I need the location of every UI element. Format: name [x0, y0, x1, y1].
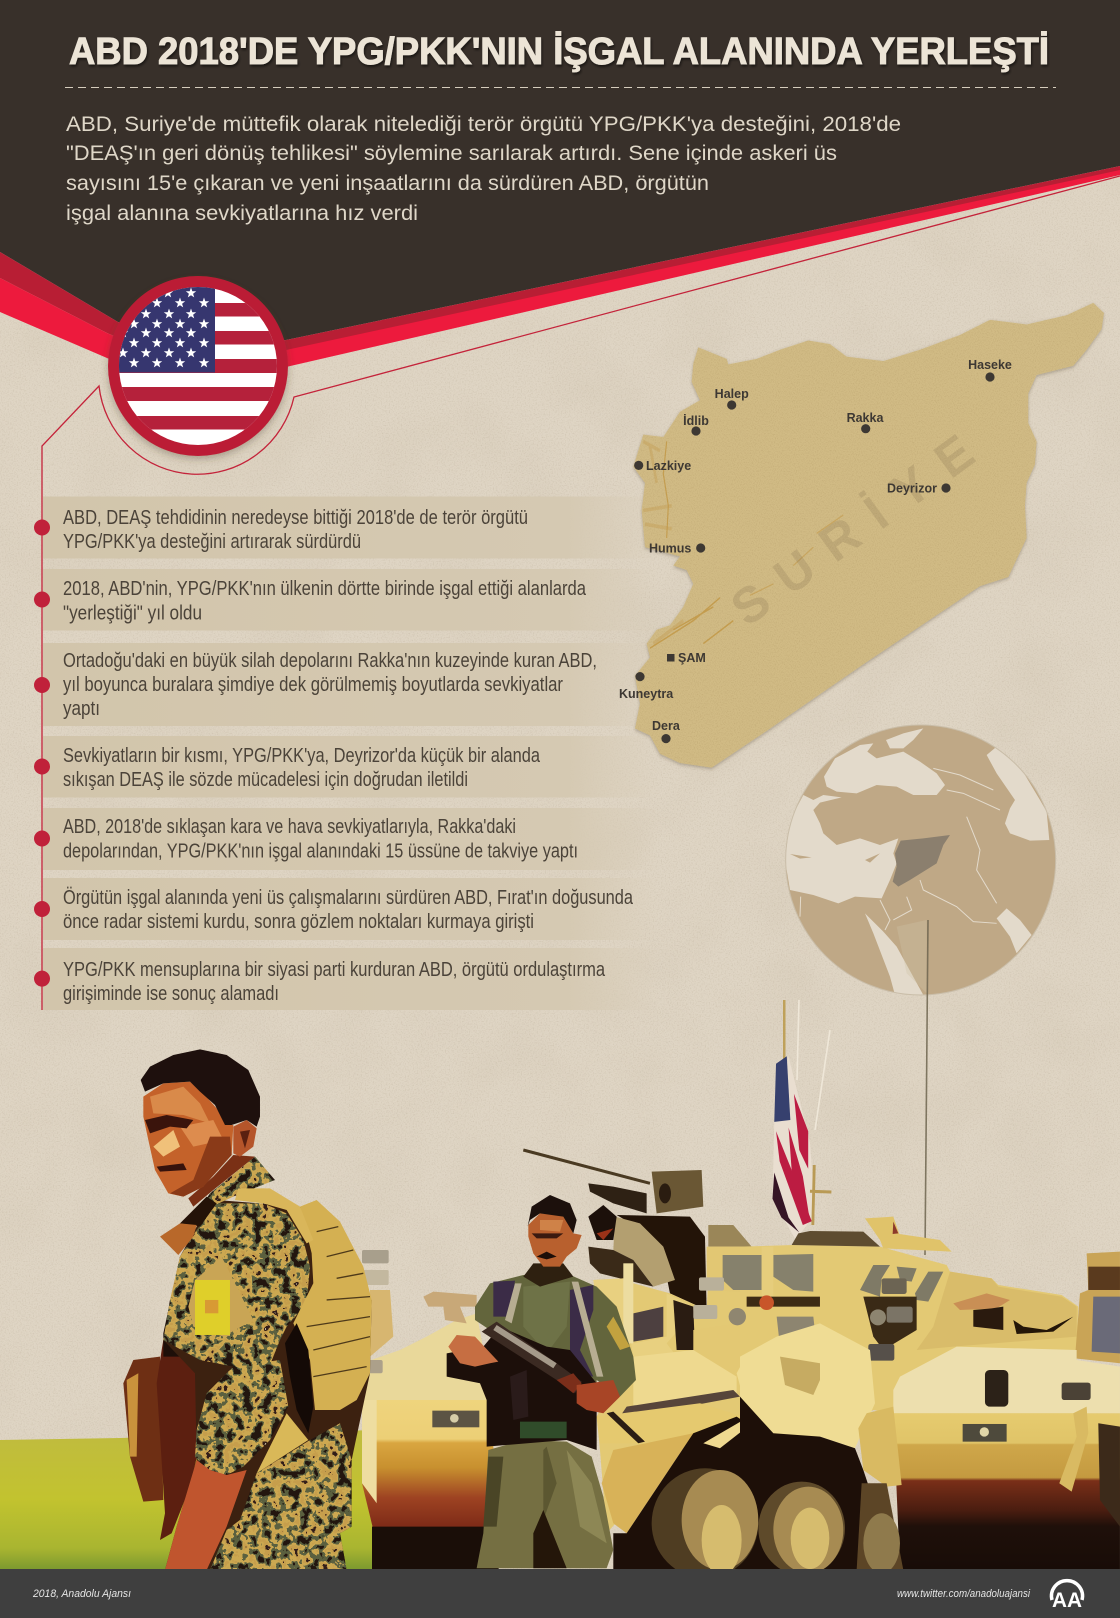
city markers: Humus — [649, 542, 691, 556]
credit: 2018, Anadolu Ajansı — [32, 1588, 131, 1600]
city markers: Deyrizor — [887, 482, 937, 496]
right part of vehicles — [740, 1217, 1120, 1575]
item 4: Sevkiyatların bir kısmı, YPG/PKK'ya, Deyrizor'da küçük bir alanda — [63, 745, 541, 767]
central lights — [863, 1297, 917, 1350]
icon: US flag badge — [108, 276, 288, 456]
vehicle flag — [772, 1000, 831, 1240]
centre vehicle rear turret — [523, 1150, 752, 1310]
map: Syria — [619, 303, 1104, 768]
second soldier — [447, 1195, 645, 1568]
item 1 — [34, 496, 660, 558]
wheel — [758, 1482, 845, 1575]
city markers — [619, 358, 1012, 743]
header dark panel — [0, 0, 1120, 350]
city markers: İdlib — [683, 413, 709, 428]
arm patch — [188, 1257, 253, 1337]
grass field — [0, 1430, 373, 1569]
watermark: SURİYE: SURİYE — [721, 424, 984, 637]
forearm — [165, 1460, 247, 1570]
item 1: YPG/PKK'ya desteğini artırarak sürdürdü — [63, 531, 361, 553]
front wheel — [652, 1468, 758, 1578]
torso base — [163, 1200, 372, 1570]
red ribbon — [0, 166, 1120, 395]
city markers: Dera — [652, 719, 681, 733]
chassis — [740, 1396, 868, 1569]
dark body — [157, 1300, 200, 1540]
foreground soldier — [123, 1049, 372, 1573]
item 4: sıkışan DEAŞ ile sözde mücadelesi için doğrudan iletildi — [63, 769, 468, 791]
trousers — [477, 1440, 613, 1568]
item 7: girişiminde ise sonuç alamadı — [63, 983, 279, 1005]
item 7: YPG/PKK mensuplarına bir siyasi parti kurduran ABD, örgütü ordulaştırma — [63, 959, 606, 981]
rifle — [482, 1322, 582, 1393]
head — [523, 1263, 573, 1287]
item 2: 2018, ABD'nin, YPG/PKK'nın ülkenin dörtte birinde işgal ettiği alanlarda — [63, 578, 587, 600]
hair — [141, 1049, 260, 1127]
neck — [188, 1155, 255, 1207]
item 5: depolarından, YPG/PKK'nın işgal alanındaki 15 üssüne de takviye yaptı — [63, 840, 578, 862]
item 3: yaptı — [63, 698, 100, 720]
locator globe — [785, 725, 1056, 995]
intro text: ABD, Suriye'de müttefik olarak nitelediği terör örgütü YPG/PKK'ya desteğini, 2018'de — [66, 113, 901, 136]
city markers: Kuneytra — [619, 687, 674, 701]
item 5 — [34, 808, 660, 870]
intro text: işgal alanına sevkiyatlarına hız verdi — [66, 202, 418, 225]
list panel — [34, 496, 660, 1010]
item 7 — [34, 948, 660, 1010]
face — [143, 1082, 233, 1197]
item 4 — [34, 736, 660, 798]
photo illustration: soldiers and armoured vehicles — [0, 1000, 1120, 1578]
centre vehicle cab windows and lights — [693, 1247, 820, 1325]
centre vehicle body — [593, 1247, 820, 1570]
item 6 — [34, 878, 660, 940]
rear vehicle — [917, 1272, 1077, 1350]
intro text: sayısını 15'e çıkaran ve yeni inşaatlarını da sürdüren ABD, örgütün — [66, 172, 709, 195]
vest — [293, 1200, 372, 1410]
front vehicle cab — [1075, 1252, 1120, 1363]
item 2: "yerleştiği" yıl oldu — [63, 602, 202, 624]
item 3: yıl boyunca buralara şimdiye dek görülmemiş boyutlarda sevkiyatlar — [63, 674, 563, 696]
item 2 — [34, 569, 660, 630]
item 6: önce radar sistemi kurdu, sonra gözlem noktaları kurmaya girişti — [63, 911, 534, 933]
city markers: Haseke — [968, 358, 1012, 372]
collar — [180, 1197, 217, 1227]
icon: AA logo: AA — [1052, 1589, 1082, 1612]
dark chest — [447, 1327, 597, 1450]
city markers: Halep — [715, 387, 749, 401]
twitter address: www.twitter.com/anadoluajansi — [897, 1588, 1030, 1600]
item 3: Ortadoğu'daki en büyük silah depolarını Rakka'nın kuzeyinde kuran ABD, — [63, 650, 597, 672]
footer bar — [0, 1569, 1120, 1618]
title: ABD 2018'DE YPG/PKK'NIN İŞGAL ALANINDA YERLEŞTİ — [69, 31, 1049, 73]
timeline connector line — [42, 176, 1120, 1010]
pouch — [123, 1357, 163, 1502]
front vehicle deck — [893, 1347, 1120, 1413]
city markers: ŞAM — [678, 651, 706, 665]
intro text: "DEAŞ'ın geri dönüş tehlikesi" söylemine sarılarak artırdı. Sene içinde askeri üs — [66, 142, 837, 165]
front vehicle hull — [893, 1413, 1120, 1570]
main body panel — [740, 1323, 875, 1448]
city markers: Rakka — [847, 411, 884, 425]
item 3 — [34, 643, 660, 726]
city markers: Lazkiye — [646, 459, 691, 473]
shirt — [475, 1274, 636, 1396]
item 1: ABD, DEAŞ tehdidinin neredeyse bittiği 2018'de de terör örgütü — [63, 507, 528, 529]
camouflage uniform — [160, 1153, 357, 1573]
country shape — [633, 303, 1104, 768]
intro text — [66, 113, 901, 225]
antenna and flag poles above the photo — [797, 920, 928, 1255]
item 6: Örgütün işgal alanında yeni üs çalışmalarını sürdüren ABD, Fırat'ın doğusunda — [63, 887, 634, 909]
left vehicle — [360, 1250, 499, 1570]
item 5: ABD, 2018'de sıklaşan kara ve hava sevkiyatlarıyla, Rakka'daki — [63, 816, 516, 838]
